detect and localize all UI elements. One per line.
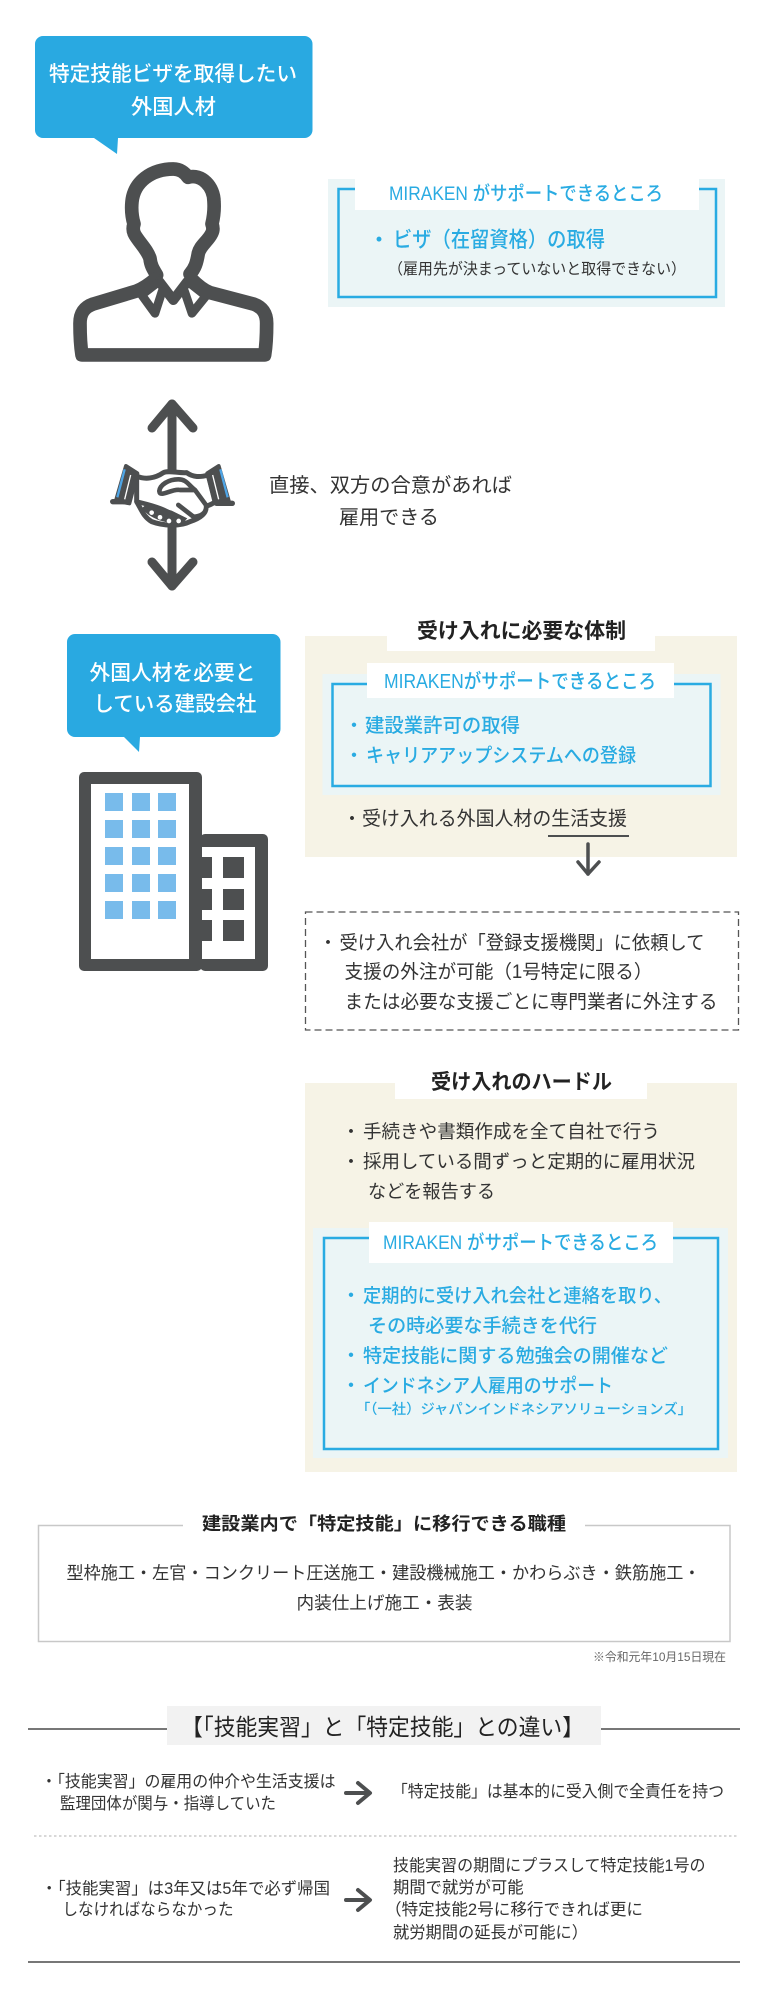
heading: eligible occupations: 建設業内で「特定技能」に移行できる職種: [202, 1514, 566, 1534]
comparison row 2: 期間で就労が可能: [393, 1878, 524, 1897]
icon: handshake: [113, 466, 232, 525]
comparison row 1: 監理団体が関与・指導していた: [60, 1794, 276, 1813]
panel: required system: ・: [344, 746, 364, 767]
icon: person: [76, 169, 271, 361]
panel: required system: 受け入れる外国人材の生活支援: [362, 808, 627, 830]
panel: hurdles: 「（一社）ジャパンインドネシアソリューションズ」: [356, 1401, 692, 1417]
panel: MIRAKEN support for visa: ・: [368, 229, 390, 252]
panel: outsourcing dashed box: 支援の外注が可能（1号特定に限る）: [344, 961, 652, 983]
panel: required system: ・: [344, 716, 364, 737]
arrow: down: [578, 844, 599, 874]
panel: hurdles: 採用している間ずっと定期的に雇用状況: [363, 1151, 695, 1172]
heading: hurdles: 受け入れのハードル: [431, 1071, 612, 1094]
panel: eligible occupations: 内装仕上げ施工・表装: [296, 1593, 472, 1613]
heading: differences: 【「技能実習」と「特定技能」との違い】: [181, 1714, 584, 1740]
panel: MIRAKEN support for visa: [328, 179, 725, 307]
panel: hurdles: 定期的に受け入れ会社と連絡を取り、: [363, 1285, 672, 1307]
comparison row 2: 技能実習の期間にプラスして特定技能1号の: [393, 1856, 706, 1875]
panel: MIRAKEN support for visa: （雇用先が決まっていないと取得できない）: [388, 260, 686, 278]
comparison row 2: （特定技能2号に移行できれば更に: [385, 1900, 643, 1919]
panel: hurdles: その時必要な手続きを代行: [368, 1315, 597, 1337]
panel: hurdles: ・: [341, 1346, 361, 1367]
icon: buildings: [79, 772, 268, 971]
panel: hurdles: [305, 1066, 737, 1472]
panel: required system: [305, 620, 737, 857]
panel: hurdles: ・: [342, 1151, 360, 1172]
speech bubble: construction company: している建設会社: [94, 693, 256, 716]
panel: hurdles: ・: [341, 1376, 361, 1397]
panel: MIRAKEN support for visa: ビザ（在留資格）の取得: [393, 228, 605, 252]
heading: differences: [28, 1706, 740, 1745]
panel: hurdles: インドネシア人雇用のサポート: [363, 1375, 613, 1397]
text: direct hiring note: 直接、双方の合意があれば: [269, 474, 512, 497]
arrow: row 1: [346, 1783, 370, 1803]
speech bubble: foreign talent: 特定技能ビザを取得したい: [49, 63, 297, 86]
panel: required system: MIRAKENがサポートできるところ: [384, 670, 656, 693]
speech bubble: construction company: 外国人材を必要と: [90, 662, 256, 685]
panel: outsourcing dashed box: 受け入れ会社が「登録支援機関」に依頼して: [340, 932, 704, 954]
panel: required system: キャリアアップシステムへの登録: [366, 745, 636, 767]
comparison row 2: [28, 1836, 740, 1963]
panel: required system: ・: [342, 809, 362, 830]
arrow: row 2: [346, 1890, 370, 1910]
panel: outsourcing dashed box: ・: [319, 932, 337, 953]
speech bubble: foreign talent: 外国人材: [131, 96, 216, 119]
comparison row 1: ・「技能実習」の雇用の仲介や生活支援は: [41, 1772, 336, 1791]
panel: eligible occupations: [38, 1514, 730, 1642]
icon: double-headed arrow: [152, 404, 193, 586]
speech bubble: construction company: [67, 634, 280, 752]
text: direct hiring note: [269, 474, 512, 529]
panel: outsourcing dashed box: [306, 912, 738, 1030]
panel: hurdles: 特定技能に関する勉強会の開催など: [363, 1345, 668, 1367]
panel: hurdles: ・: [342, 1121, 360, 1142]
comparison row 2: ・「技能実習」は3年又は5年で必ず帰国: [41, 1879, 330, 1898]
panel: hurdles: 手続きや書類作成を全て自社で行う: [363, 1121, 660, 1142]
heading: required system: 受け入れに必要な体制: [417, 620, 626, 643]
comparison row 2: しなければならなかった: [62, 1900, 234, 1919]
panel: hurdles: などを報告する: [368, 1181, 495, 1202]
comparison row 2: 就労期間の延長が可能に）: [393, 1923, 588, 1942]
comparison row 1: 「特定技能」は基本的に受入側で全責任を持つ: [392, 1782, 724, 1801]
comparison row 1: [41, 1772, 724, 1813]
speech bubble: foreign talent: [35, 36, 312, 154]
text: direct hiring note: 雇用できる: [339, 507, 439, 529]
panel: hurdles: MIRAKEN がサポートできるところ: [383, 1232, 658, 1254]
note: date: ※令和元年10月15日現在: [593, 1650, 726, 1664]
panel: outsourcing dashed box: または必要な支援ごとに専門業者に外注する: [344, 991, 718, 1013]
panel: hurdles: ・: [341, 1286, 361, 1307]
panel: required system: 建設業許可の取得: [365, 715, 520, 737]
panel: MIRAKEN support for visa: MIRAKEN がサポートできるところ: [389, 183, 663, 205]
panel: eligible occupations: 型枠施工・左官・コンクリート圧送施工・建設機械施工・かわらぶき・鉄筋施工・: [66, 1563, 700, 1583]
